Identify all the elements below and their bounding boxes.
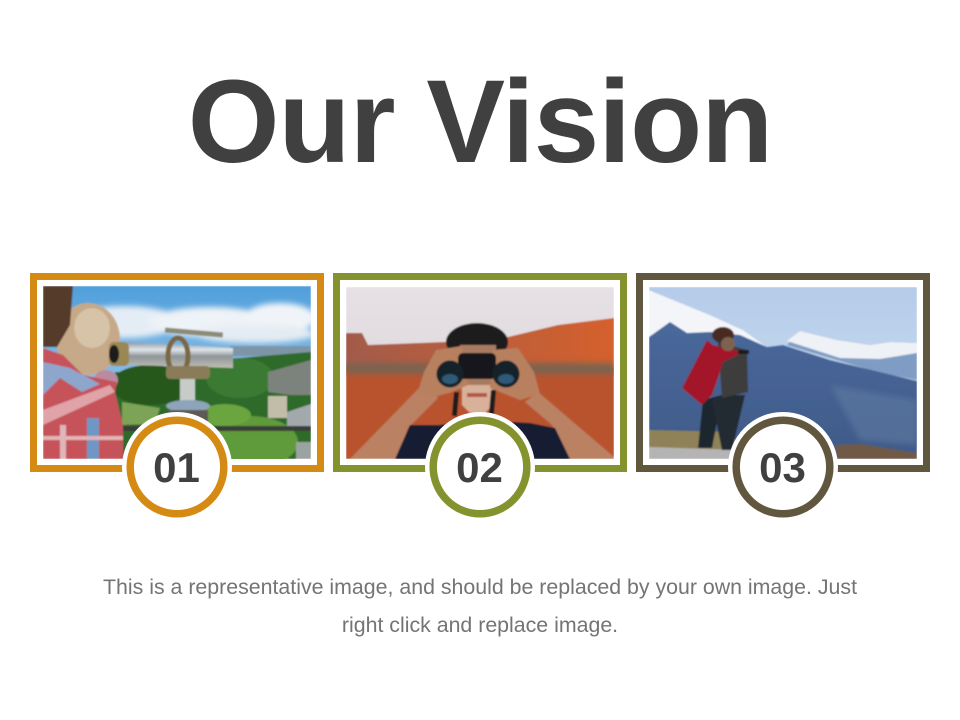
badge 02 bbox=[425, 412, 535, 522]
photo: man with binoculars bbox=[346, 287, 614, 459]
panel: image card 03 bbox=[640, 276, 926, 522]
frame 03 bbox=[640, 276, 926, 468]
caption text: This is a representative image, and should be replaced by your own image. Just bbox=[103, 575, 857, 599]
title: Our Vision bbox=[188, 56, 772, 188]
panel: image card 02 bbox=[336, 276, 624, 522]
caption text bbox=[103, 575, 857, 637]
caption text: right click and replace image. bbox=[342, 613, 618, 637]
badge 01 bbox=[122, 412, 232, 522]
badge 03: 03 bbox=[759, 444, 806, 491]
frame 02 bbox=[336, 276, 624, 468]
panel: image card 01 bbox=[34, 276, 320, 522]
badge 03 bbox=[728, 412, 838, 522]
frame 01 bbox=[34, 276, 320, 468]
badge 01: 01 bbox=[153, 444, 200, 491]
photo: telescope viewers bbox=[43, 286, 316, 468]
photo: couple and mountains bbox=[649, 287, 917, 459]
badge 02: 02 bbox=[456, 444, 503, 491]
